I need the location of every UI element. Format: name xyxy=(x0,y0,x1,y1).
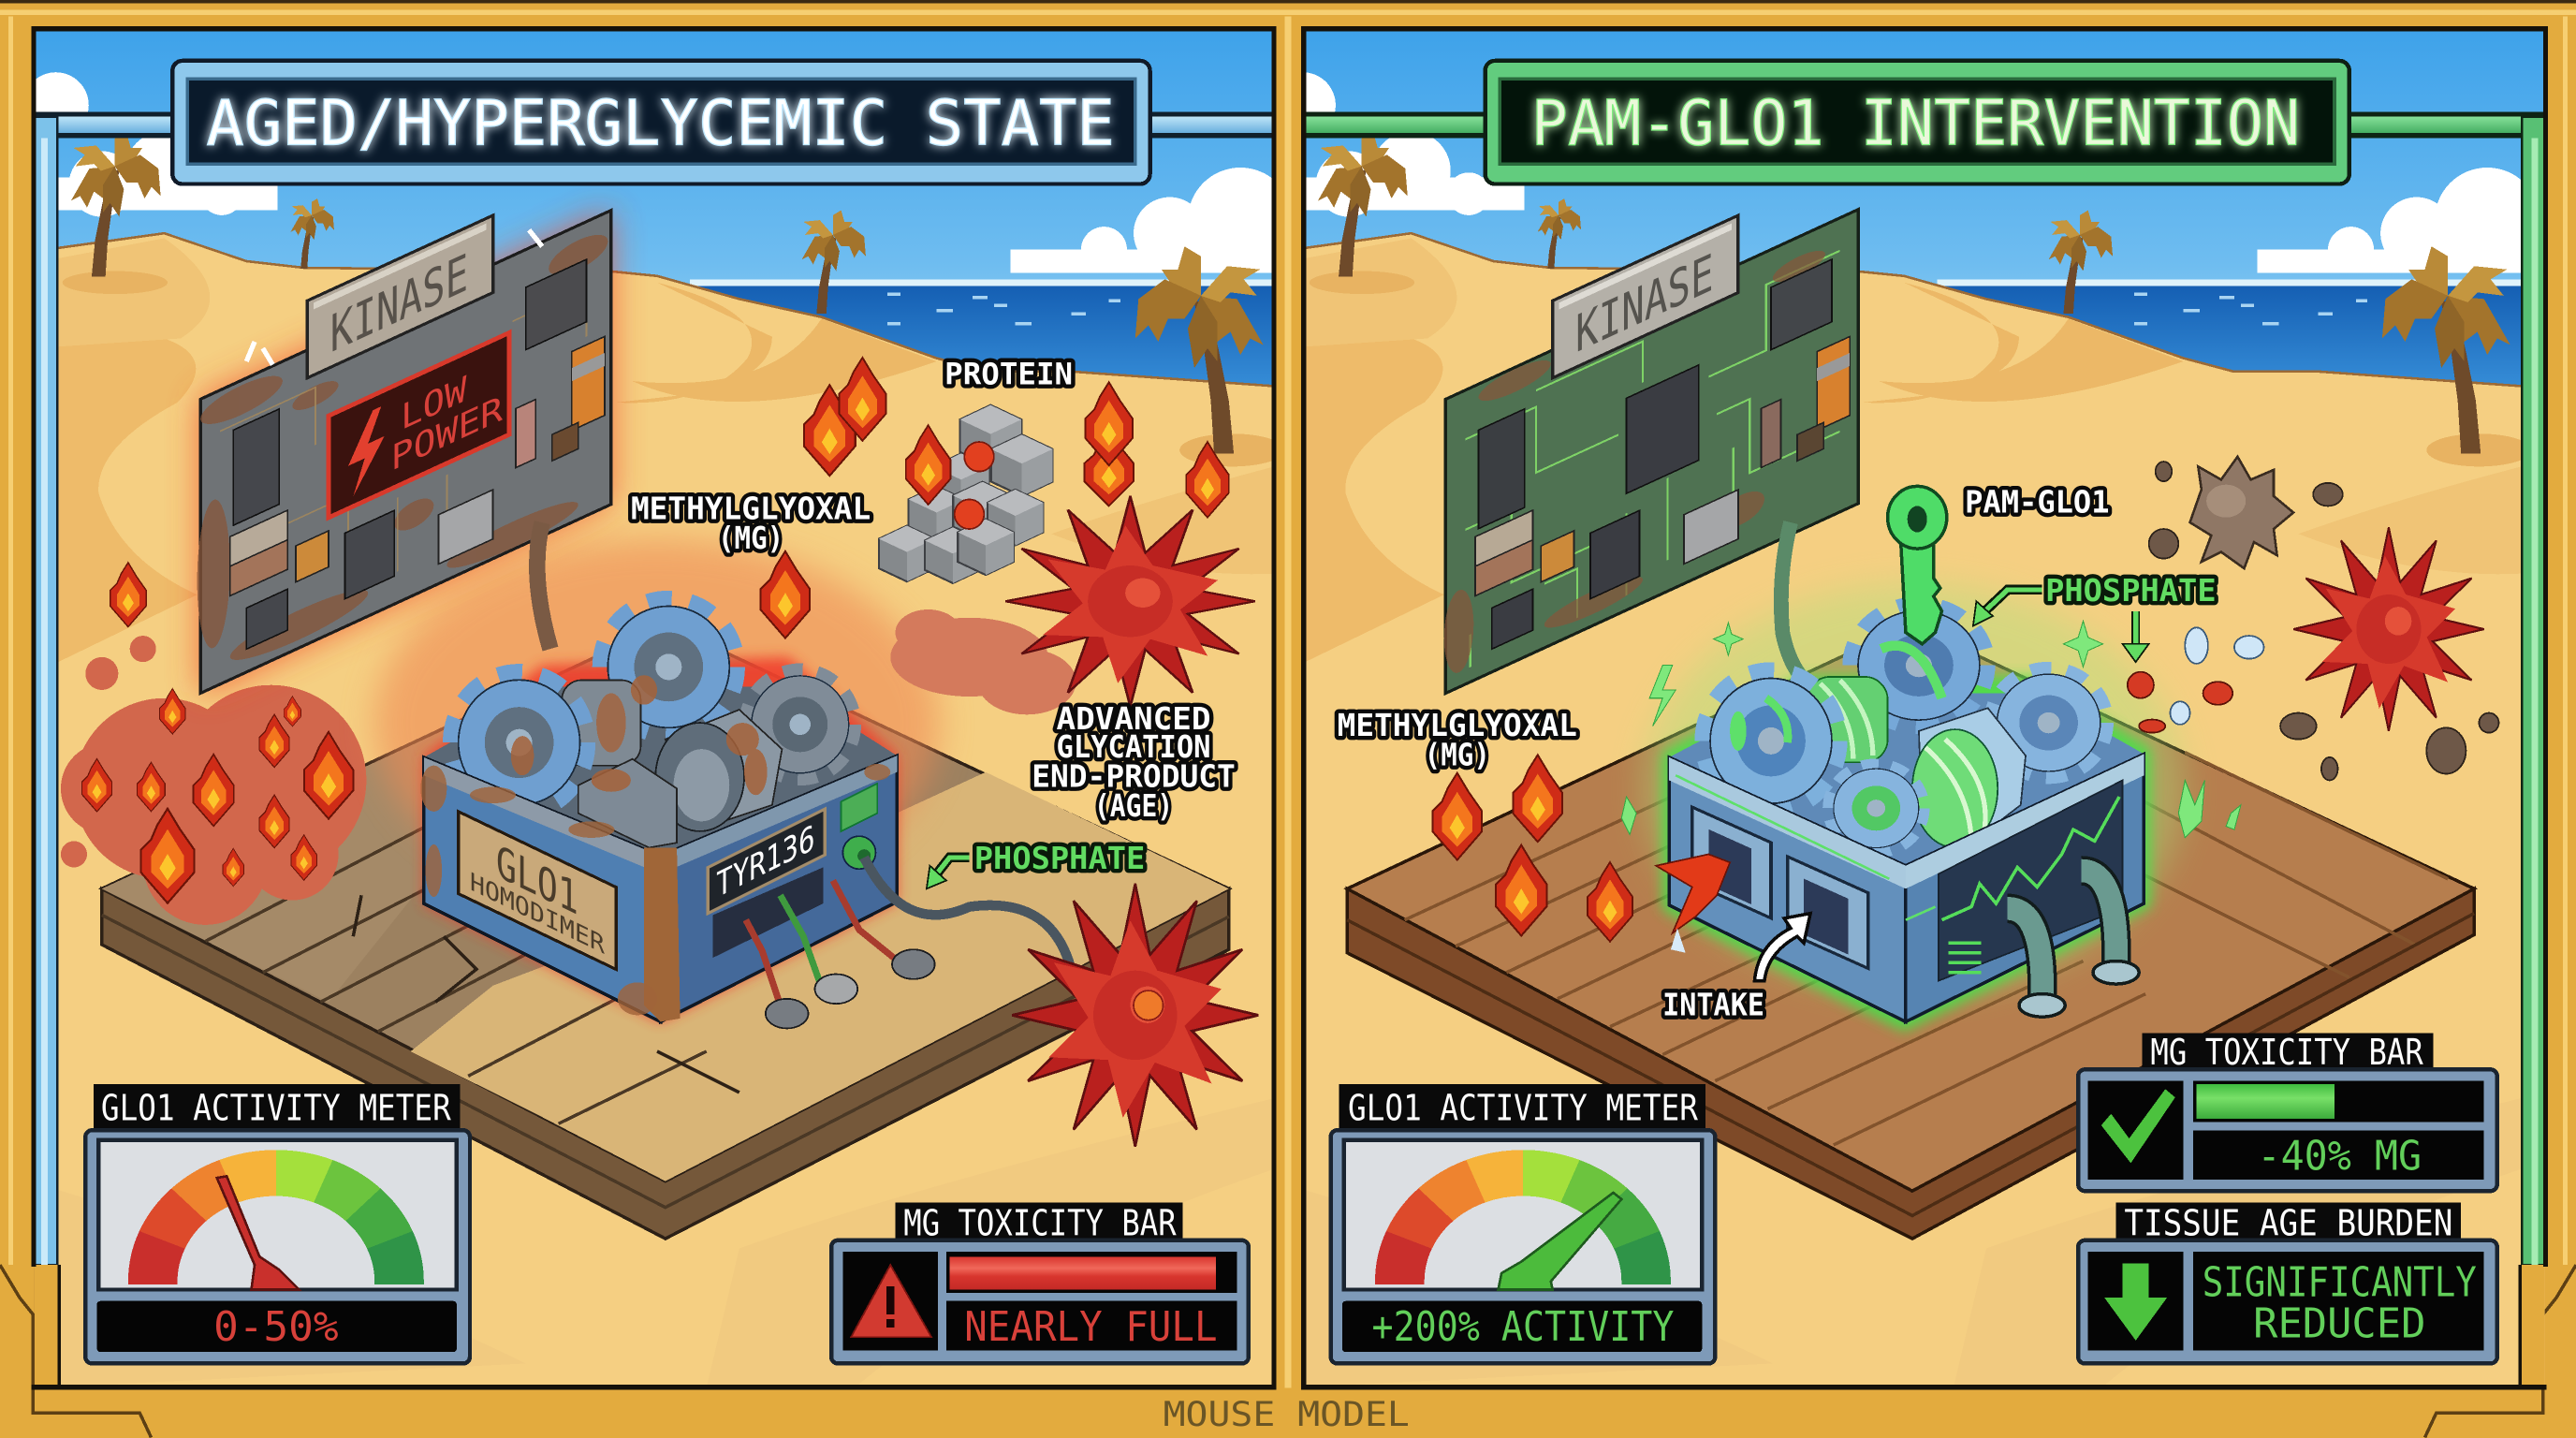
label: advanced glycation end-product: END-PRODUCT xyxy=(1032,758,1236,795)
intake arrow xyxy=(1754,914,1810,981)
title: aged hyperglycemic state: AGED/HYPERGLYCEMIC STATE xyxy=(206,86,1115,159)
label: intake: INTAKE xyxy=(1662,986,1764,1022)
protein cluster xyxy=(879,405,1076,714)
meter: GLO1 activity: GLO1 ACTIVITY METER xyxy=(101,1088,451,1130)
right panel frame pipe xyxy=(1301,26,2548,1389)
sign: low power xyxy=(329,332,509,518)
bar: MG toxicity, nearly full xyxy=(831,1202,1249,1363)
PAM-GLO1 key xyxy=(1888,486,1947,644)
bar: MG toxicity, nearly full: MG TOXICITY BAR xyxy=(903,1203,1177,1245)
weathered wooden platform xyxy=(102,624,1229,1239)
kinase circuit board, restored xyxy=(1444,160,1858,694)
chip components xyxy=(1475,251,1850,660)
meter: GLO1 activity xyxy=(1331,1084,1715,1363)
title: aged hyperglycemic state xyxy=(172,61,1150,184)
title: PAM-GLO1 intervention: PAM-GLO1 INTERVENTION xyxy=(1531,86,2300,159)
advanced glycation end-product spikes xyxy=(1005,496,1255,707)
label: PAM-GLO1: PAM-GLO1 xyxy=(1965,483,2110,520)
label: methylglyoxal xyxy=(1338,707,1577,773)
label and arrows: phosphate: PHOSPHATE xyxy=(2045,572,2217,609)
meter: GLO1 activity: GLO1 ACTIVITY METER xyxy=(1348,1088,1699,1130)
label and arrow: phosphate: PHOSPHATE xyxy=(974,840,1145,876)
label and arrows: phosphate xyxy=(1973,572,2217,662)
methylglyoxal flames entering intake xyxy=(1433,755,1730,953)
right beach background xyxy=(1270,30,2576,1438)
healthy wooden platform xyxy=(1347,624,2474,1239)
label: methylglyoxal: METHYLGLYOXAL xyxy=(631,490,871,526)
label: advanced glycation end-product: ADVANCED xyxy=(1057,700,1211,737)
advanced glycation spiked ball with cable xyxy=(1012,884,1258,1147)
label: protein: PROTEIN xyxy=(944,359,1073,392)
circuit readout screen xyxy=(1939,780,2123,981)
left panel frame pipe xyxy=(31,26,1277,1389)
meter: GLO1 activity: +200% ACTIVITY xyxy=(1372,1303,1674,1351)
bar: MG toxicity, reduced xyxy=(2078,1032,2497,1191)
label: advanced glycation end-product: (AGE) xyxy=(1094,787,1173,824)
bar: MG toxicity, reduced: -40% MG xyxy=(2258,1132,2422,1180)
red halo around machine xyxy=(374,539,940,907)
label: advanced glycation end-product xyxy=(1032,700,1236,824)
port label: TYR136: TYR136 xyxy=(716,817,815,906)
meter: GLO1 activity: 0-50% xyxy=(213,1303,339,1351)
status: tissue AGE burden xyxy=(2078,1202,2497,1363)
label: methylglyoxal: (MG) xyxy=(718,520,783,556)
title: PAM-GLO1 intervention xyxy=(1486,61,2349,184)
label and arrow: phosphate xyxy=(927,840,1145,888)
panel: PAM-GLO1 intervention xyxy=(1270,26,2576,1438)
sign: low power: LOW xyxy=(401,369,467,439)
kinase nameplate: KINASE xyxy=(330,242,468,365)
nameplate: GLO1 homodimer: HOMODIMER xyxy=(470,866,605,961)
glowing PAM-GLO1 machine xyxy=(1621,608,2241,1032)
panel: aged hyperglycemic state xyxy=(23,26,1332,1438)
nameplate: GLO1 homodimer: GLO1 xyxy=(496,835,578,926)
kinase circuit board, rusted xyxy=(198,161,611,695)
bar: MG toxicity, nearly full: NEARLY FULL xyxy=(964,1303,1218,1351)
chip components xyxy=(230,251,605,660)
mouse model footer label: MOUSE MODEL xyxy=(1164,1394,1410,1434)
status: tissue AGE burden: TISSUE AGE BURDEN xyxy=(2124,1203,2452,1245)
green sparkles xyxy=(1621,621,2241,838)
kinase nameplate: KINASE xyxy=(1575,242,1714,365)
intake ports xyxy=(1692,807,1868,968)
rusted GLO1 homodimer machine xyxy=(420,603,1071,1028)
nameplate: GLO1 homodimer xyxy=(459,812,616,969)
degraded AGE rubble xyxy=(2128,457,2499,780)
label: methylglyoxal: METHYLGLYOXAL xyxy=(1338,707,1577,743)
cables and connectors xyxy=(746,858,1071,1005)
left beach background xyxy=(23,30,1332,1438)
sign: low power: POWER xyxy=(391,388,504,479)
meter: GLO1 activity xyxy=(85,1084,470,1363)
methylglyoxal flames xyxy=(82,358,1229,903)
label: methylglyoxal xyxy=(631,490,871,556)
coolant pipes xyxy=(2008,871,2139,1017)
label: methylglyoxal: (MG) xyxy=(1425,737,1490,773)
advanced glycation end-product spiked ball xyxy=(2293,527,2484,731)
status: tissue AGE burden: REDUCED xyxy=(2253,1299,2425,1347)
bar: MG toxicity, reduced: MG TOXICITY BAR xyxy=(2150,1032,2423,1074)
label: advanced glycation end-product: GLYCATION xyxy=(1057,728,1211,765)
pale green aura xyxy=(1643,583,2185,994)
status: tissue AGE burden: SIGNIFICANTLY xyxy=(2203,1258,2477,1306)
red goo splat xyxy=(61,636,366,925)
